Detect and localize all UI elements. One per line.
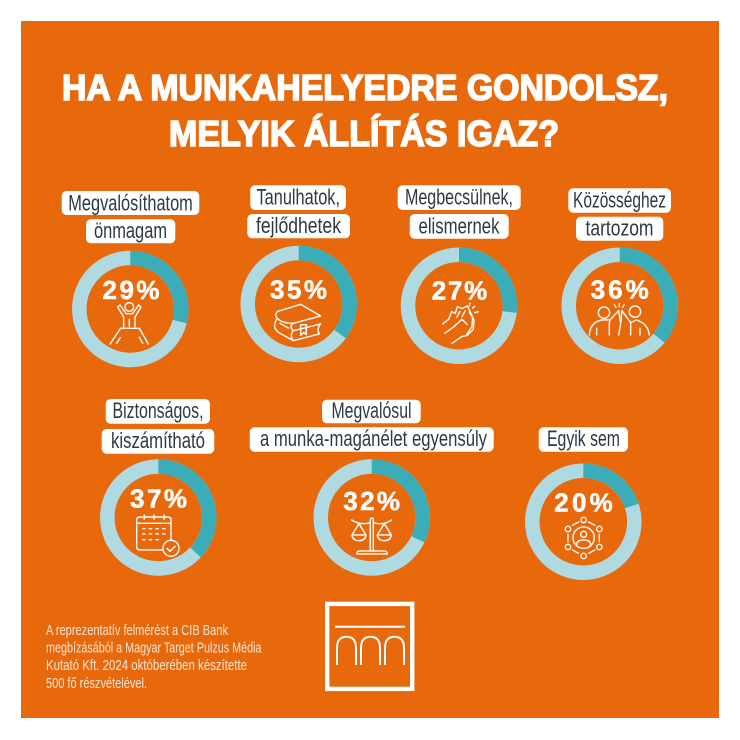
icon: person in network bbox=[565, 517, 602, 559]
label: Tanulhatok, fejlődhetek: Tanulhatok, bbox=[256, 184, 340, 210]
donut chart: 35% bbox=[248, 253, 350, 355]
label: Közösséghez tartozom: Közösséghez bbox=[573, 188, 666, 212]
label: Megbecsülnek, elismernek: elismernek bbox=[418, 214, 500, 238]
icon: books bbox=[275, 304, 321, 341]
donut chart: 37%: 37% bbox=[130, 484, 187, 514]
label: Megvalósul a munka-magánélet egyensúly bbox=[250, 398, 494, 452]
footnote text bbox=[46, 623, 262, 692]
label: Megvalósíthatom önmagam: önmagam bbox=[94, 218, 167, 243]
icon: balance scale bbox=[352, 518, 392, 554]
footnote text: Kutató Kft. 2024 októberében készítette bbox=[46, 658, 247, 674]
donut chart: 27%: 27% bbox=[432, 275, 487, 305]
panel: Megvalósul a munka-magánélet egyensúly bbox=[250, 398, 494, 568]
donut chart: 20%: 20% bbox=[554, 488, 613, 518]
footnote text: megbízásából a Magyar Target Pulzus Média bbox=[46, 640, 262, 656]
donut chart: 35%: 35% bbox=[270, 274, 327, 304]
donut chart: 36%: 36% bbox=[591, 274, 649, 304]
donut chart: 20% bbox=[532, 471, 634, 573]
donut chart: 36% bbox=[569, 255, 671, 357]
panel: Megvalósíthatom önmagam bbox=[62, 190, 199, 360]
label: Megbecsülnek, elismernek: Megbecsülnek, bbox=[405, 184, 513, 210]
label: Biztonságos, kiszámítható: Biztonságos, bbox=[112, 398, 204, 423]
donut chart: 32% bbox=[321, 466, 423, 568]
title: MELYIK ÁLLÍTÁS IGAZ? bbox=[169, 113, 559, 154]
icon: person on summit bbox=[110, 303, 148, 344]
panel: Közösséghez tartozom bbox=[568, 188, 671, 357]
label: Egyik sem: Egyik sem bbox=[547, 426, 620, 451]
label: Biztonságos, kiszámítható: kiszámítható bbox=[111, 428, 205, 453]
donut chart: 29%: 29% bbox=[102, 275, 160, 305]
panel: Biztonságos, kiszámítható bbox=[102, 398, 214, 568]
footnote text: 500 fő részvételével. bbox=[46, 676, 147, 692]
panel: Megbecsülnek, elismernek bbox=[398, 184, 521, 357]
label: Megbecsülnek, elismernek bbox=[398, 184, 521, 239]
icon: clapping hands bbox=[443, 303, 478, 343]
label: Megvalósul a munka-magánélet egyensúly: Megvalósul bbox=[332, 398, 412, 423]
label: Biztonságos, kiszámítható bbox=[102, 398, 214, 454]
label: Tanulhatok, fejlődhetek: fejlődhetek bbox=[256, 213, 342, 238]
title bbox=[62, 67, 668, 154]
logo: CIB bridge bbox=[327, 604, 412, 689]
donut chart: 37% bbox=[107, 466, 209, 568]
label: Közösséghez tartozom: tartozom bbox=[586, 216, 654, 240]
label: Megvalósul a munka-magánélet egyensúly: a munka-magánélet egyensúly bbox=[260, 426, 487, 451]
icon: high five bbox=[589, 304, 649, 335]
label: Megvalósíthatom önmagam bbox=[62, 190, 199, 243]
panel: Tanulhatok, fejlődhetek bbox=[247, 184, 350, 355]
donut chart: 32%: 32% bbox=[343, 486, 400, 516]
label: Megvalósíthatom önmagam: Megvalósíthatom bbox=[68, 190, 193, 216]
donut chart: 29% bbox=[79, 258, 181, 360]
label: Tanulhatok, fejlődhetek bbox=[247, 184, 350, 238]
title: HA A MUNKAHELYEDRE GONDOLSZ, bbox=[62, 67, 668, 108]
label: Közösséghez tartozom bbox=[568, 188, 671, 241]
footnote text: A reprezentatív felmérést a CIB Bank bbox=[46, 623, 229, 639]
icon: calendar with check bbox=[137, 515, 179, 556]
donut chart: 27% bbox=[408, 255, 510, 357]
panel: Egyik sem bbox=[532, 426, 634, 573]
